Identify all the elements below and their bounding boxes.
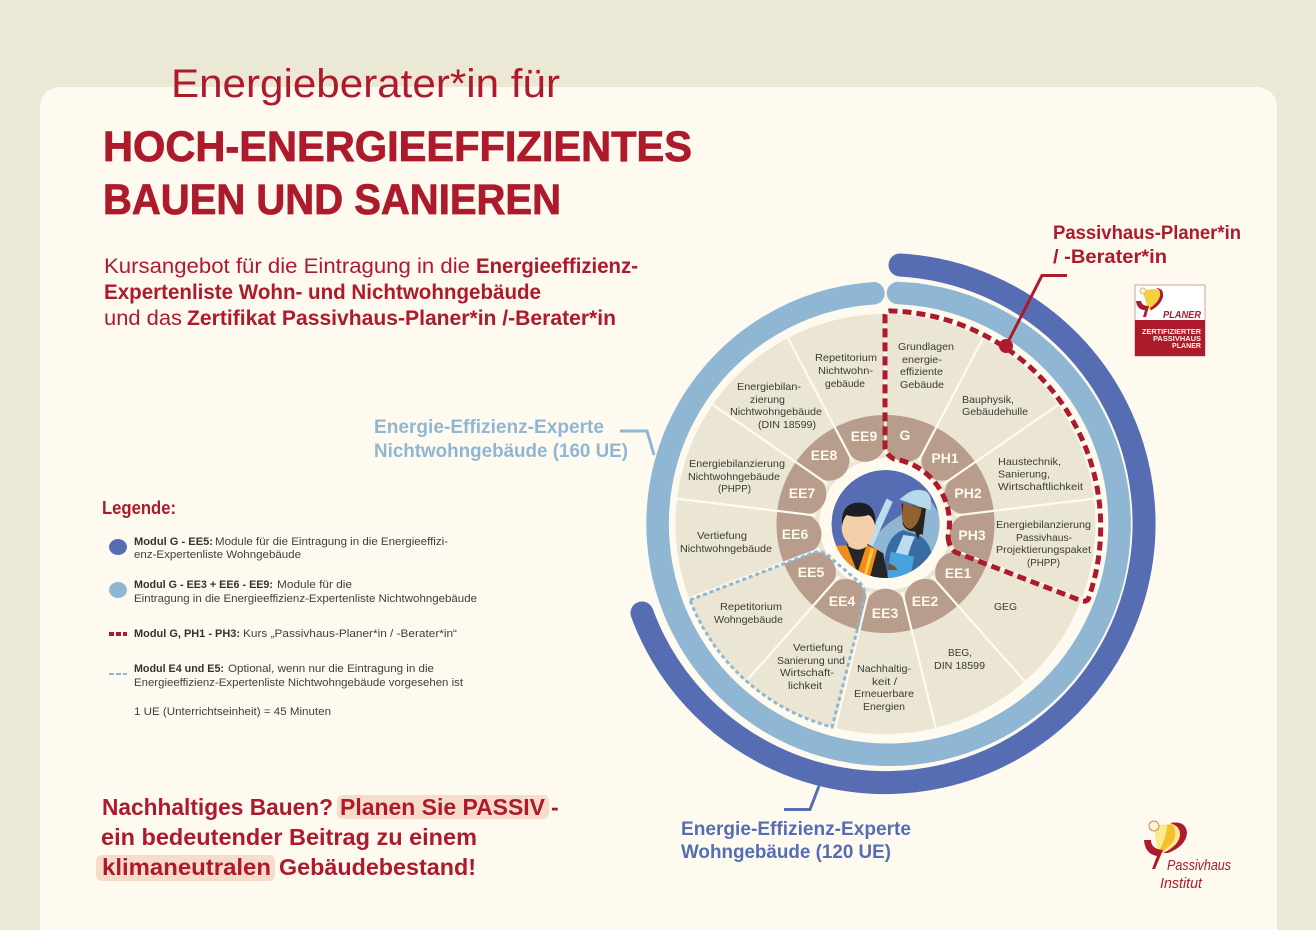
title line: Hoch-energieeffizientes: HOCH-ENERGIEEFFIZIENTES: [103, 123, 692, 171]
logo: Passivhaus Institut: Passivhaus: [1167, 858, 1231, 874]
woman: [885, 490, 933, 583]
closing statement: klimaneutralen: [102, 854, 271, 880]
intro text: Expertenliste Wohn- und Nichtwohngebäude: [104, 281, 541, 304]
segment text: EE6: Nichtwohngebäude: [680, 543, 772, 555]
segment text: EE7: Energiebilanzierung: [689, 458, 785, 470]
legend item: optional modules: Energieeffizienz-Expertenliste Nichtwohngebäude vorgesehen ist: [134, 677, 463, 689]
segment text: EE7: (PHPP): [718, 483, 751, 495]
legend swatch: light blue: [109, 582, 127, 598]
segment text: EE5: Repetitorium: [720, 601, 782, 613]
legend item: Passivhaus course: Kurs „Passivhaus-Planer*in / -Berater*in“: [243, 628, 457, 640]
segment text: EE4: Sanierung und: [777, 655, 845, 667]
closing statement: [96, 794, 559, 881]
background building: [840, 502, 940, 578]
segment text: EE8: [730, 381, 822, 431]
module codes: EE7: [789, 485, 815, 501]
title line: Bauen und Sanieren: BAUEN UND SANIEREN: [103, 176, 561, 224]
module codes: EE8: [811, 447, 837, 463]
legend item: Passivhaus course: Modul G, PH1 - PH3:: [134, 628, 240, 640]
badge: Zertifizierter Passivhaus Planer: PASSIVHAUS: [1153, 336, 1201, 343]
segment text: EE7: Nichtwohngebäude: [688, 471, 780, 483]
segment text: PH3: [996, 519, 1091, 569]
label: Passivhaus-Planer: / -Berater*in: [1053, 247, 1167, 268]
legend note: 1 UE (Unterrichtseinheit) = 45 Minuten: [134, 706, 331, 718]
module codes: EE9: [851, 428, 877, 444]
red dashed outline: Passivhaus modules: [885, 311, 1101, 601]
middle ring: Nichtwohngebäude 160 UE: [658, 293, 1120, 755]
cream hub: [820, 458, 952, 590]
segment text: EE6: Vertiefung: [697, 530, 747, 542]
segment text: PH1: Gebäudehulle: [962, 406, 1028, 418]
closing statement: ein bedeutender Beitrag zu einem: [101, 824, 477, 850]
segment text: G: energie-: [902, 354, 943, 366]
closing statement: Planen Sie PASSIV: [340, 794, 546, 820]
segment text: G: Gebäude: [900, 379, 944, 391]
legend item: Wohngebäude: [134, 536, 448, 561]
segment text: EE2: BEG,: [948, 647, 972, 659]
module codes: PH1: [931, 450, 959, 466]
segment text: PH1: [962, 394, 1028, 418]
segment text: EE3: Erneuerbare: [854, 688, 914, 700]
module codes: PH2: [954, 485, 982, 501]
segment text: EE8: Energiebilan-: [737, 381, 802, 393]
segment text: EE4: Wirtschaft-: [780, 667, 835, 679]
legend item: optional modules: [134, 663, 463, 689]
segment text: G: Grundlagen: [898, 341, 954, 353]
legend heading: Legende:: [102, 498, 176, 518]
badge: Zertifizierter Passivhaus Planer: [1135, 285, 1205, 356]
segment text: EE3: keit /: [872, 676, 897, 688]
module codes: EE2: [912, 593, 938, 609]
badge logo: [1136, 288, 1163, 317]
legend swatch: dark blue: [109, 539, 127, 555]
module codes: EE4: [829, 593, 855, 609]
segment text: EE7: [688, 458, 785, 495]
man: [836, 502, 888, 578]
legend item: optional modules: Optional, wenn nur die Eintragung in die: [228, 663, 434, 675]
intro text: Kursangebot für die Eintragung in die: [104, 255, 470, 278]
segment text: PH2: Wirtschaftlichkeit: [998, 481, 1083, 493]
label: Wohngebäude: Wohngebäude (120 UE): [681, 842, 891, 863]
intro text: [104, 255, 638, 330]
segment text: PH3: (PHPP): [1027, 557, 1060, 569]
logo: Passivhaus Institut: [1144, 821, 1231, 892]
segment text: EE6: [680, 530, 772, 555]
segment text: EE3: [854, 663, 914, 713]
closing statement: -: [551, 794, 559, 820]
segment text: PH2: Sanierung,: [998, 468, 1050, 480]
segment text: EE9: [815, 352, 877, 390]
legend swatch: blue dashes: [109, 673, 127, 675]
segment text: EE3: Nachhaltig-: [857, 663, 911, 675]
logo: Passivhaus Institut: Institut: [1160, 876, 1203, 892]
legend item: Wohngebäude: enz-Expertenliste Wohngebäude: [134, 549, 301, 561]
segment text: PH3: Projektierungspaket: [996, 544, 1091, 556]
label: Passivhaus-Planer: Passivhaus-Planer*in: [1053, 223, 1241, 244]
arrow: Wohngebäude connector: [784, 786, 819, 810]
module codes: EE3: [872, 605, 898, 621]
legend item: Passivhaus course: [134, 628, 457, 640]
module codes: EE6: [782, 526, 808, 542]
segment text: EE5: [714, 601, 783, 626]
highlight: Planen Sie PASSIV: [337, 795, 549, 819]
segment text: G: [898, 341, 954, 391]
badge: Zertifizierter Passivhaus Planer: ZERTIFIZIERTER: [1142, 329, 1201, 336]
legend item: Nichtwohngebäude: Module für die: [277, 579, 352, 591]
label: Passivhaus-Planer: [1053, 223, 1241, 268]
legend item: Nichtwohngebäude: [134, 579, 477, 605]
segment text: EE4: lichkeit: [788, 680, 822, 692]
legend item: Nichtwohngebäude: Modul G - EE3 + EE6 - EE9:: [134, 579, 273, 591]
segment text: G: effiziente: [900, 366, 943, 378]
segment text: EE1: GEG: [994, 601, 1017, 613]
legend item: Wohngebäude: Modul G - EE5:: [134, 536, 213, 548]
label: Nichtwohngebäude: [374, 417, 628, 462]
segment text: EE9: Nichtwohn-: [818, 365, 874, 377]
intro text: und das: [104, 307, 182, 330]
closing statement: Gebäudebestand!: [279, 854, 476, 880]
segment text: PH3: Passivhaus-: [1016, 532, 1072, 544]
segment text: PH3: Energiebilanzierung: [996, 519, 1091, 531]
module codes: PH3: [958, 527, 986, 543]
segment text: EE8: (DIN 18599): [758, 419, 816, 431]
module codes: G: [900, 427, 911, 443]
highlight: klimaneutralen: [96, 855, 275, 881]
segment text: EE5: Wohngebäude: [714, 614, 783, 626]
segment text: EE2: [934, 647, 985, 672]
segment text: EE8: zierung: [750, 394, 785, 406]
legend swatch: red dashes: [109, 632, 127, 636]
module codes: [782, 427, 986, 621]
label: Nichtwohngebäude: Energie-Effizienz-Experte: [374, 417, 604, 438]
segment text: EE9: gebäude: [825, 378, 865, 390]
segment text: PH2: [998, 456, 1083, 493]
title block: [103, 62, 692, 224]
module blobs: [774, 412, 997, 633]
segment text: EE9: Repetitorium: [815, 352, 877, 364]
segment text: EE4: Vertiefung: [793, 642, 843, 654]
legend item: optional modules: Modul E4 und E5:: [134, 663, 224, 675]
label: Wohngebäude: Energie-Effizienz-Experte: [681, 819, 911, 840]
segment text: PH2: Haustechnik,: [998, 456, 1061, 468]
intro text: Energieeffizienz-: [476, 255, 638, 278]
module codes: EE5: [798, 564, 824, 580]
segment text: EE4: [777, 642, 845, 692]
blue dashed outline: optional modules: [690, 552, 864, 727]
folder: [888, 552, 914, 578]
label: Nichtwohngebäude: Nichtwohngebäude (160 UE): [374, 441, 628, 462]
segment text: EE2: DIN 18599: [934, 660, 985, 672]
intro text: Zertifikat Passivhaus-Planer*in /-Berater*in: [187, 307, 616, 330]
module codes: EE1: [945, 565, 971, 581]
segment text: PH1: Bauphysik,: [962, 394, 1014, 406]
logo mark: [1144, 821, 1187, 869]
arrow: Passivhaus connector: [999, 276, 1067, 353]
beige disc: [676, 314, 1096, 734]
title line: Energieberater: Energieberater*in für: [171, 62, 560, 106]
closing statement: Nachhaltiges Bauen?: [102, 794, 333, 820]
legend: [102, 498, 477, 718]
module wheel: [675, 312, 1096, 734]
arrow: Nichtwohngebäude connector: [620, 431, 654, 455]
outer ring: Wohngebäude 120 UE: [642, 265, 1144, 783]
legend item: Wohngebäude: Module für die Eintragung in die Energieeffizi-: [215, 536, 448, 548]
badge: Zertifizierter Passivhaus Planer: PLANER: [1172, 343, 1201, 350]
legend item: Nichtwohngebäude: Eintragung in die Energieeffizienz-Expertenliste Nichtwohngebäude: [134, 593, 477, 605]
hub illustration: two building professionals: [832, 470, 943, 583]
ruler: [868, 498, 893, 547]
segment text: EE3: Energien: [863, 701, 905, 713]
segment text: EE8: Nichtwohngebäude: [730, 406, 822, 418]
label: Wohngebäude: [681, 819, 911, 863]
badge: Zertifizierter Passivhaus Planer: PLANER: [1163, 310, 1202, 321]
